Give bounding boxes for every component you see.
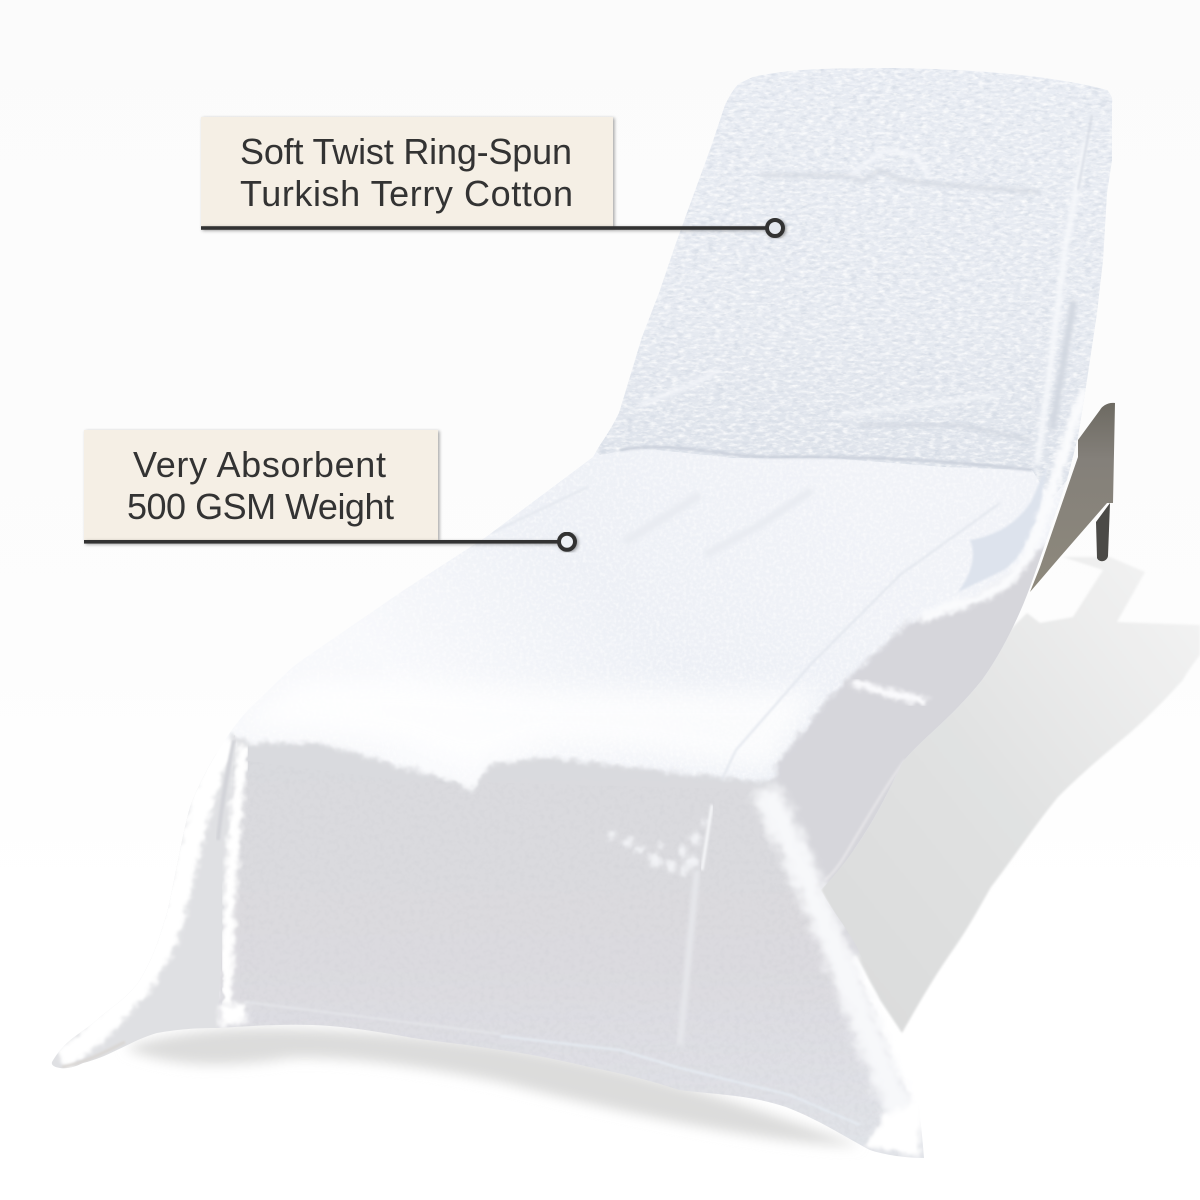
callout box xyxy=(201,117,613,227)
towel seat top xyxy=(406,449,1066,834)
towel left corner drape xyxy=(52,736,235,1068)
towel backrest xyxy=(590,60,1120,500)
callout: Soft Twist Ring-Spun Turkish Terry Cotton xyxy=(201,117,783,236)
callout box xyxy=(84,430,438,540)
ground shadow behind lounger xyxy=(125,557,1200,1146)
callout: Very Absorbent 500 GSM Weight xyxy=(84,430,575,550)
backrest terry texture xyxy=(590,60,1120,500)
side fold: fluffy white rim xyxy=(925,395,1083,618)
side panel hem xyxy=(825,760,905,880)
towel side panel in shade xyxy=(772,546,1044,956)
callout text: Soft Twist Ring-Spun xyxy=(240,131,572,172)
wrinkle near seat corner xyxy=(853,683,927,702)
sunlit rim along right of front panel xyxy=(245,790,920,1158)
towel front drop panel xyxy=(217,733,924,1158)
callout text: 500 GSM Weight xyxy=(127,486,394,527)
front top wrinkle xyxy=(438,775,479,792)
callout text: Very Absorbent xyxy=(133,444,386,485)
callout text: Turkish Terry Cotton xyxy=(240,173,573,214)
lounger frame and leg xyxy=(1030,403,1115,592)
left corner fold: white rim and strip xyxy=(62,738,492,1067)
sun speckle patch on front panel xyxy=(608,819,708,874)
callout leader line and ring xyxy=(201,220,783,236)
side fold: shaded pocket xyxy=(960,473,1046,590)
front panel terry texture xyxy=(240,760,900,1160)
backrest wrinkles and hem xyxy=(620,115,1092,470)
callout leader line and ring xyxy=(84,534,575,550)
